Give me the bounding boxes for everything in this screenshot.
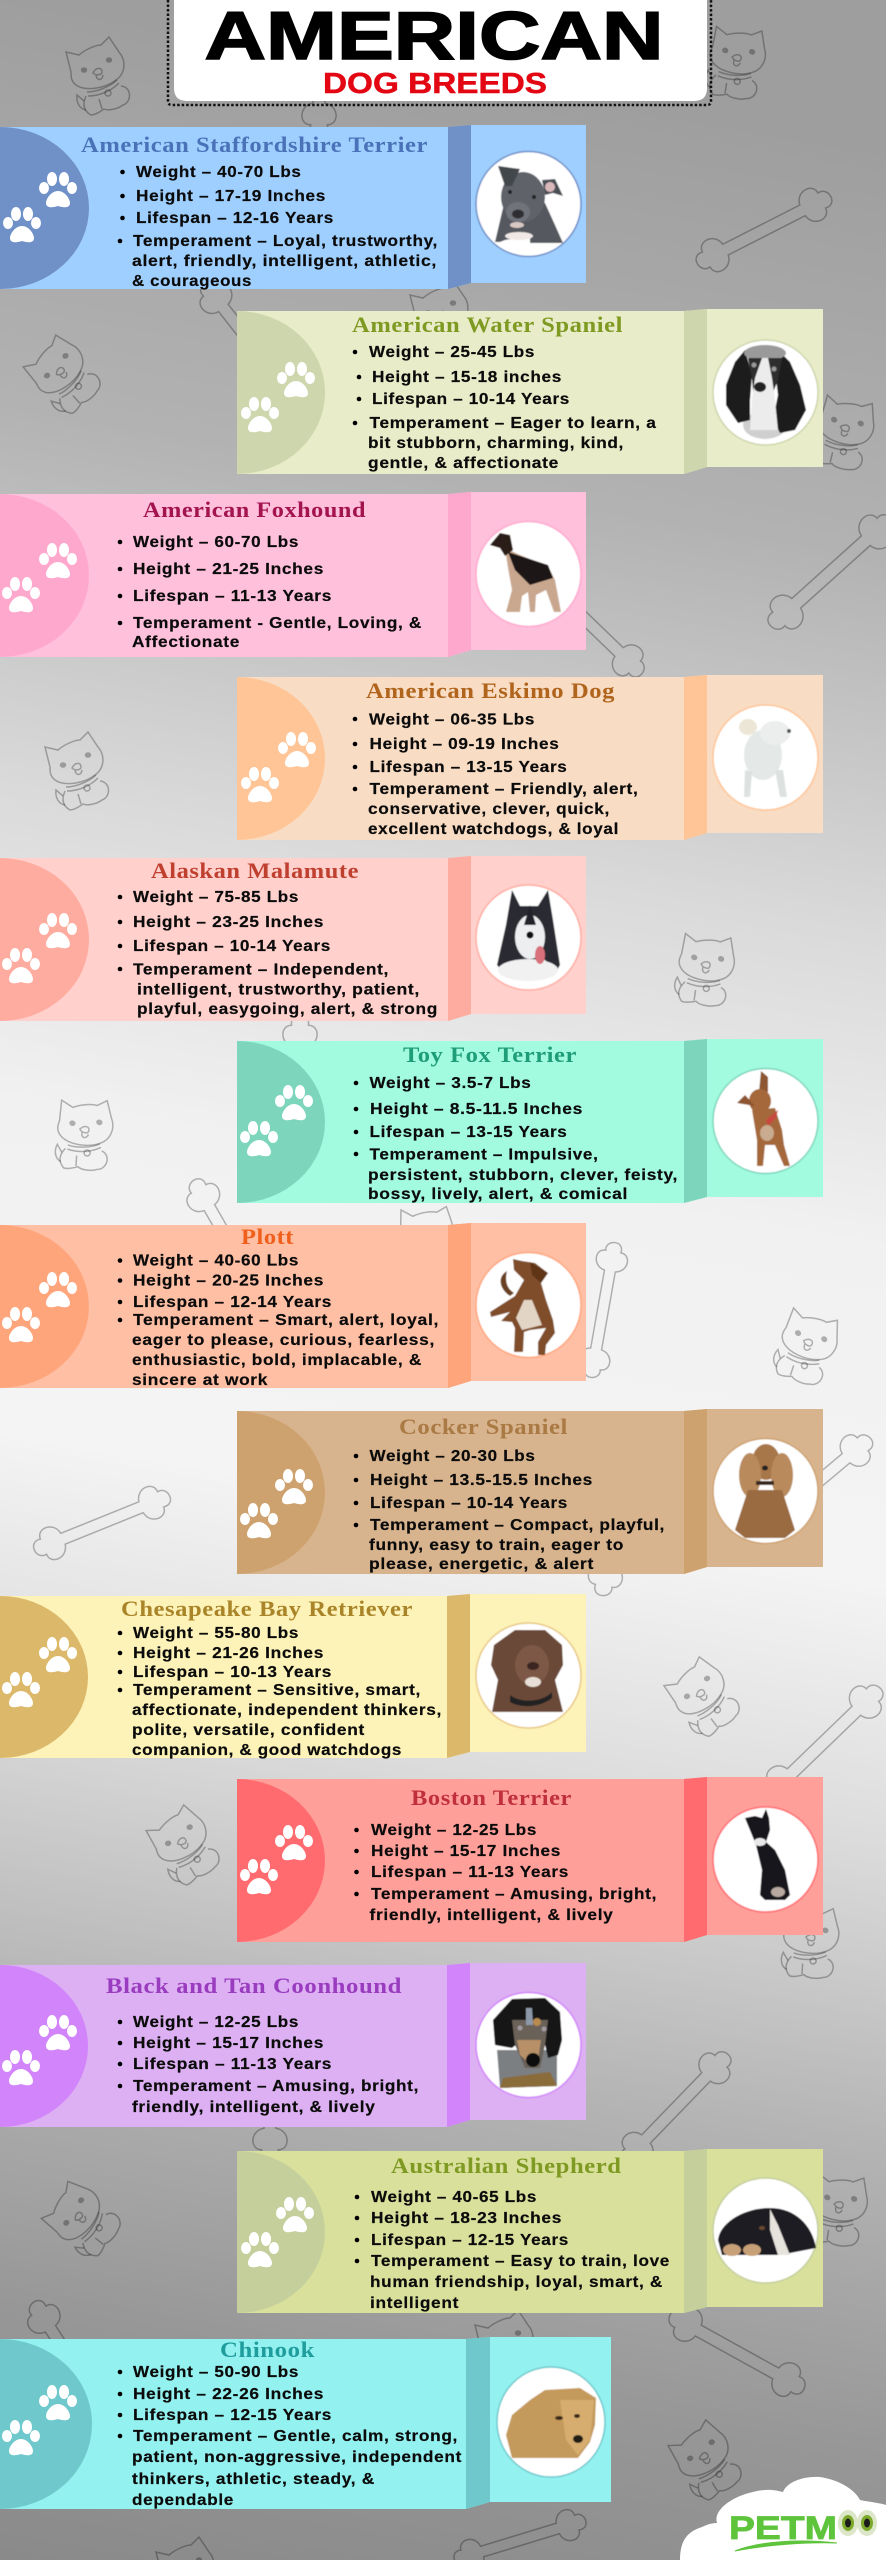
panel: Boston Terrier <box>237 1777 823 1942</box>
icon: paws <box>240 1825 313 1894</box>
photo: boston terrier <box>713 1807 818 1912</box>
facts: Lifespan – 11-13 Years <box>133 588 332 605</box>
photo: chinook <box>497 2367 605 2477</box>
icon: paws <box>2 1637 77 1707</box>
photo: cocker spaniel <box>713 1438 818 1544</box>
photo: foxhound <box>476 522 581 626</box>
facts: sincere at work <box>132 1372 268 1389</box>
facts: friendly, intelligent, & lively <box>132 2099 376 2116</box>
facts: Weight – 40-65 Lbs <box>371 2189 537 2206</box>
facts: Height – 20-25 Inches <box>133 1272 324 1290</box>
facts: Temperament – Friendly, alert, <box>370 781 638 798</box>
facts <box>354 1075 678 1203</box>
facts: bossy, lively, alert, & comical <box>368 1186 628 1203</box>
facts: Height – 09-19 Inches <box>370 736 560 753</box>
facts: Temperament – Eager to learn, a <box>370 415 656 432</box>
facts: Weight – 40-70 Lbs <box>136 164 302 181</box>
facts: Lifespan – 10-14 Years <box>133 938 331 955</box>
facts: & courageous <box>132 273 252 290</box>
facts: thinkers, athletic, steady, & <box>132 2471 375 2488</box>
title: American: AMERICAN <box>204 0 664 74</box>
facts: Temperament – Easy to train, love <box>371 2253 670 2270</box>
facts: Weight – 12-25 Lbs <box>133 2014 299 2031</box>
facts: Lifespan – 11-13 Years <box>133 2056 332 2073</box>
facts <box>118 889 438 1018</box>
facts: Temperament – Gentle, calm, strong, <box>133 2428 458 2445</box>
facts: Temperament – Independent, <box>133 962 389 978</box>
facts: Weight – 06-35 Lbs <box>369 712 535 728</box>
facts: Lifespan – 11-13 Years <box>371 1864 569 1881</box>
facts <box>354 1448 665 1573</box>
facts <box>118 164 438 290</box>
facts: Height – 21-26 Inches <box>133 1645 324 1662</box>
heading: American Staffordshire Terrier <box>81 132 428 157</box>
photo: toy fox terrier <box>713 1068 818 1174</box>
facts: Height – 15-17 Inches <box>133 2035 324 2052</box>
facts: persistent, stubborn, clever, feisty, <box>368 1167 678 1184</box>
panel: American Eskimo Dog <box>237 675 823 840</box>
facts: Temperament – Amusing, bright, <box>371 1886 657 1903</box>
facts: Height – 22-26 Inches <box>133 2386 324 2403</box>
facts: intelligent <box>370 2295 459 2312</box>
facts: Weight – 50-90 Lbs <box>133 2364 299 2381</box>
facts: Weight – 55-80 Lbs <box>133 1625 299 1642</box>
icon: paws <box>241 732 316 802</box>
facts: alert, friendly, intelligent, athletic, <box>132 253 437 270</box>
logo wordmark: PETM <box>729 2510 837 2546</box>
panel: Plott <box>0 1223 586 1389</box>
facts: enthusiastic, bold, implacable, & <box>132 1352 422 1369</box>
panel: Chesapeake Bay Retriever <box>0 1594 586 1759</box>
facts: polite, versatile, confident <box>132 1722 365 1739</box>
photo: australian shepherd <box>713 2178 818 2283</box>
facts: please, energetic, & alert <box>369 1556 594 1573</box>
photo: coonhound <box>476 1992 581 2098</box>
icon: paws <box>2 1272 77 1342</box>
facts: intelligent, trustworthy, patient, <box>137 982 420 998</box>
facts <box>118 2014 419 2116</box>
facts: affectionate, independent thinkers, <box>132 1702 442 1719</box>
facts: Weight – 40-60 Lbs <box>133 1252 299 1270</box>
subtitle: dog breeds: DOG BREEDS <box>323 68 547 100</box>
facts: bit stubborn, charming, kind, <box>368 435 624 452</box>
icon: paws <box>2 2385 77 2455</box>
heading: Chesapeake Bay Retriever <box>121 1596 413 1621</box>
heading: American Water Spaniel <box>352 312 623 337</box>
heading: Australian Shepherd <box>391 2153 622 2178</box>
facts: Weight – 25-45 Lbs <box>369 344 535 361</box>
facts: Lifespan – 10-13 Years <box>133 1664 332 1681</box>
facts: Temperament – Impulsive, <box>370 1146 598 1164</box>
facts: Weight – 12-25 Lbs <box>371 1822 537 1839</box>
photo: water spaniel <box>713 340 818 445</box>
facts: Lifespan – 12-16 Years <box>136 210 334 227</box>
icon: paws <box>240 1085 313 1156</box>
icon: paws <box>3 172 77 242</box>
facts: Temperament – Amusing, bright, <box>133 2078 419 2095</box>
facts: Height – 17-19 Inches <box>136 188 326 205</box>
facts: patient, non-aggressive, independent <box>132 2449 462 2466</box>
facts: Weight – 75-85 Lbs <box>133 889 299 906</box>
facts: Height – 8.5-11.5 Inches <box>370 1101 583 1118</box>
photo: malamute <box>476 885 581 990</box>
panel: Toy Fox Terrier <box>237 1039 823 1203</box>
facts: Weight – 3.5-7 Lbs <box>370 1075 532 1092</box>
facts: playful, easygoing, alert, & strong <box>137 1001 438 1018</box>
icon: paws <box>241 362 315 432</box>
logo swoosh <box>735 2541 837 2551</box>
panel: American Staffordshire Terrier <box>0 125 586 290</box>
panel: Black and Tan Coonhound <box>0 1963 586 2127</box>
logo: Petmoo cloud <box>680 2477 886 2560</box>
facts: funny, easy to train, eager to <box>369 1537 624 1554</box>
heading: Boston Terrier <box>411 1785 572 1810</box>
facts <box>355 2189 670 2312</box>
facts: Lifespan – 13-15 Years <box>370 1124 568 1141</box>
facts <box>118 2364 462 2509</box>
facts: Affectionate <box>132 634 240 651</box>
panel: Alaskan Malamute <box>0 856 586 1021</box>
facts: dependable <box>132 2492 234 2509</box>
photo: staffordshire terrier <box>476 152 581 256</box>
facts: Height – 15-18 inches <box>372 369 562 386</box>
facts: human friendship, loyal, smart, & <box>370 2274 663 2291</box>
facts: Lifespan – 12-14 Years <box>133 1294 332 1311</box>
icon: paws <box>2 913 77 983</box>
facts <box>118 1625 442 1759</box>
heading: Toy Fox Terrier <box>403 1042 577 1067</box>
icon: paws <box>2 543 77 612</box>
heading: Plott <box>241 1224 294 1249</box>
panel: Chinook <box>0 2337 611 2509</box>
facts: Lifespan – 10-14 Years <box>372 391 570 408</box>
facts: Temperament – Sensitive, smart, <box>133 1682 421 1699</box>
heading: Alaskan Malamute <box>151 858 359 883</box>
icon: paws <box>2 2015 77 2085</box>
facts: Height – 21-25 Inches <box>133 561 324 578</box>
icon: paws <box>240 1469 313 1538</box>
facts: Temperament – Loyal, trustworthy, <box>133 233 438 250</box>
facts: excellent watchdogs, & loyal <box>368 821 619 838</box>
heading: Black and Tan Coonhound <box>106 1973 402 1998</box>
facts: conservative, clever, quick, <box>368 801 610 818</box>
facts: Height – 18-23 Inches <box>371 2210 562 2227</box>
heading: Chinook <box>220 2337 315 2362</box>
heading: Cocker Spaniel <box>399 1414 568 1439</box>
panel: American Water Spaniel <box>237 309 823 474</box>
photo: eskimo dog <box>713 705 818 810</box>
panel: Cocker Spaniel <box>237 1409 823 1574</box>
icon: paws <box>241 2197 314 2267</box>
facts: Height – 15-17 Inches <box>371 1843 561 1860</box>
panel: American Foxhound <box>0 492 586 657</box>
facts: companion, & good watchdogs <box>132 1742 402 1759</box>
facts: Temperament – Compact, playful, <box>370 1517 665 1534</box>
facts <box>353 712 638 838</box>
facts: gentle, & affectionate <box>368 455 559 472</box>
facts: eager to please, curious, fearless, <box>132 1332 435 1349</box>
facts: Lifespan – 12-15 Years <box>371 2232 569 2249</box>
panel: Australian Shepherd <box>237 2149 823 2313</box>
facts: Lifespan – 13-15 Years <box>370 759 568 776</box>
heading: American Eskimo Dog <box>366 678 615 703</box>
facts: Temperament - Gentle, Loving, & <box>133 615 422 632</box>
facts: Lifespan – 12-15 Years <box>133 2407 332 2424</box>
facts <box>353 344 656 472</box>
facts <box>354 1822 657 1924</box>
photo: plott <box>476 1252 581 1358</box>
facts <box>118 534 422 651</box>
facts: Height – 13.5-15.5 Inches <box>370 1472 593 1489</box>
facts: Temperament – Smart, alert, loyal, <box>133 1312 439 1329</box>
facts: Lifespan – 10-14 Years <box>370 1495 568 1512</box>
title banner <box>168 0 711 105</box>
heading: American Foxhound <box>143 497 366 522</box>
logo eyes <box>838 2510 877 2536</box>
facts <box>118 1252 439 1389</box>
facts: Weight – 20-30 Lbs <box>370 1448 536 1465</box>
facts: friendly, intelligent, & lively <box>370 1907 614 1924</box>
photo: chesapeake bay retriever <box>476 1623 581 1728</box>
facts: Weight – 60-70 Lbs <box>133 534 299 551</box>
facts: Height – 23-25 Inches <box>133 914 324 931</box>
